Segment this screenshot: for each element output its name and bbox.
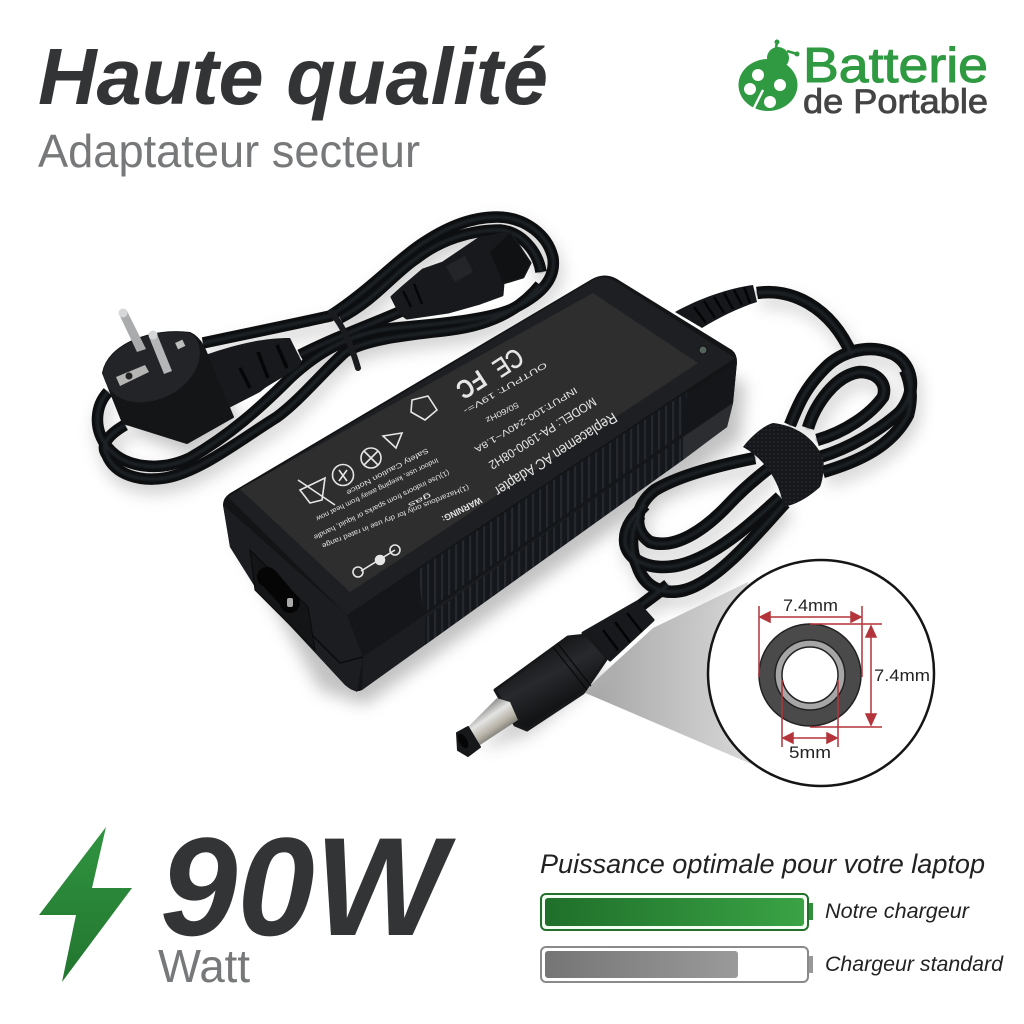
adapter: [223, 276, 737, 692]
logo: Batterie de Portable: [738, 39, 988, 121]
label text: 50/60Hz: [484, 400, 520, 425]
plug body: [103, 332, 233, 443]
adapter side bands: [347, 362, 737, 657]
logo word: Batterie: Batterie: [803, 39, 988, 93]
DC plug: [456, 602, 653, 756]
label text: Safety Caution Notice: [345, 446, 429, 496]
plug earth clip: [116, 365, 149, 386]
subtitle: Adaptateur secteur: [38, 125, 420, 177]
plug strain relief: [205, 338, 302, 410]
adapter body: [223, 276, 737, 691]
DC metal tip: [468, 698, 518, 747]
comparison heading: Puissance optimale pour votre laptop: [540, 849, 985, 879]
dimension: height: 7.4mm: [874, 666, 930, 685]
product shadow: [100, 226, 915, 750]
dimension: width: 7.4mm: [783, 596, 838, 615]
DC cable and loops: [625, 292, 911, 606]
dimension: inner: 5mm: [789, 743, 831, 762]
label panel: [240, 293, 698, 592]
adapter top rim: [228, 277, 735, 615]
battery: standard charger: [541, 947, 813, 982]
logo word: de Portable: de Portable: [803, 83, 988, 121]
icon: ladybug: [738, 40, 800, 111]
label text: (1)Use indoors from sparks or liquid, handle: [312, 468, 450, 540]
socket end: [223, 505, 363, 692]
label text: INPUT:100-240V~1.8A: [473, 385, 579, 455]
velcro strap: [743, 423, 824, 507]
plug pins: [119, 311, 146, 352]
label text: gas: [406, 491, 432, 509]
dimension lines: [759, 606, 882, 747]
label icons: [298, 396, 437, 577]
CE mark: CE: [488, 342, 529, 383]
unit: Watt: Watt: [158, 940, 250, 992]
DC strain relief: [583, 602, 653, 660]
wattage: 90W: 90W: [160, 808, 457, 965]
LED: [699, 346, 707, 354]
IEC connector on cord: [392, 233, 530, 318]
FC mark: FC: [450, 364, 492, 406]
power cord: [97, 217, 553, 479]
circle frame: [708, 560, 934, 786]
label: Chargeur standard: Chargeur standard: [825, 953, 1004, 976]
label text: Indoor use, keeping away from heat now: [314, 456, 439, 522]
connector cross-section: [759, 624, 861, 726]
magnifier cone: [583, 582, 770, 772]
label text: WARNING:: [440, 495, 484, 524]
label text: (1)Hazardous only for dry use in rated range: [321, 483, 470, 549]
label text: [312, 342, 620, 549]
label: Notre chargeur: Notre chargeur: [825, 900, 970, 923]
battery: our charger: [541, 894, 813, 930]
adapter side ribs: [418, 392, 687, 613]
title: Haute qualité: [38, 32, 548, 121]
label text: OUTPUT: 19V=-: [461, 360, 548, 416]
icon: lightning bolt: [39, 827, 132, 982]
adapter strain relief: [675, 285, 757, 328]
label text: Replacemen AC Adapter: [491, 409, 620, 499]
DC barrel body: [495, 635, 607, 730]
cord tie: [331, 312, 358, 368]
euro plug: [103, 308, 302, 443]
zoom circle detail: [708, 560, 934, 786]
label text: MODEL: PA-1900-08H2: [486, 394, 599, 472]
